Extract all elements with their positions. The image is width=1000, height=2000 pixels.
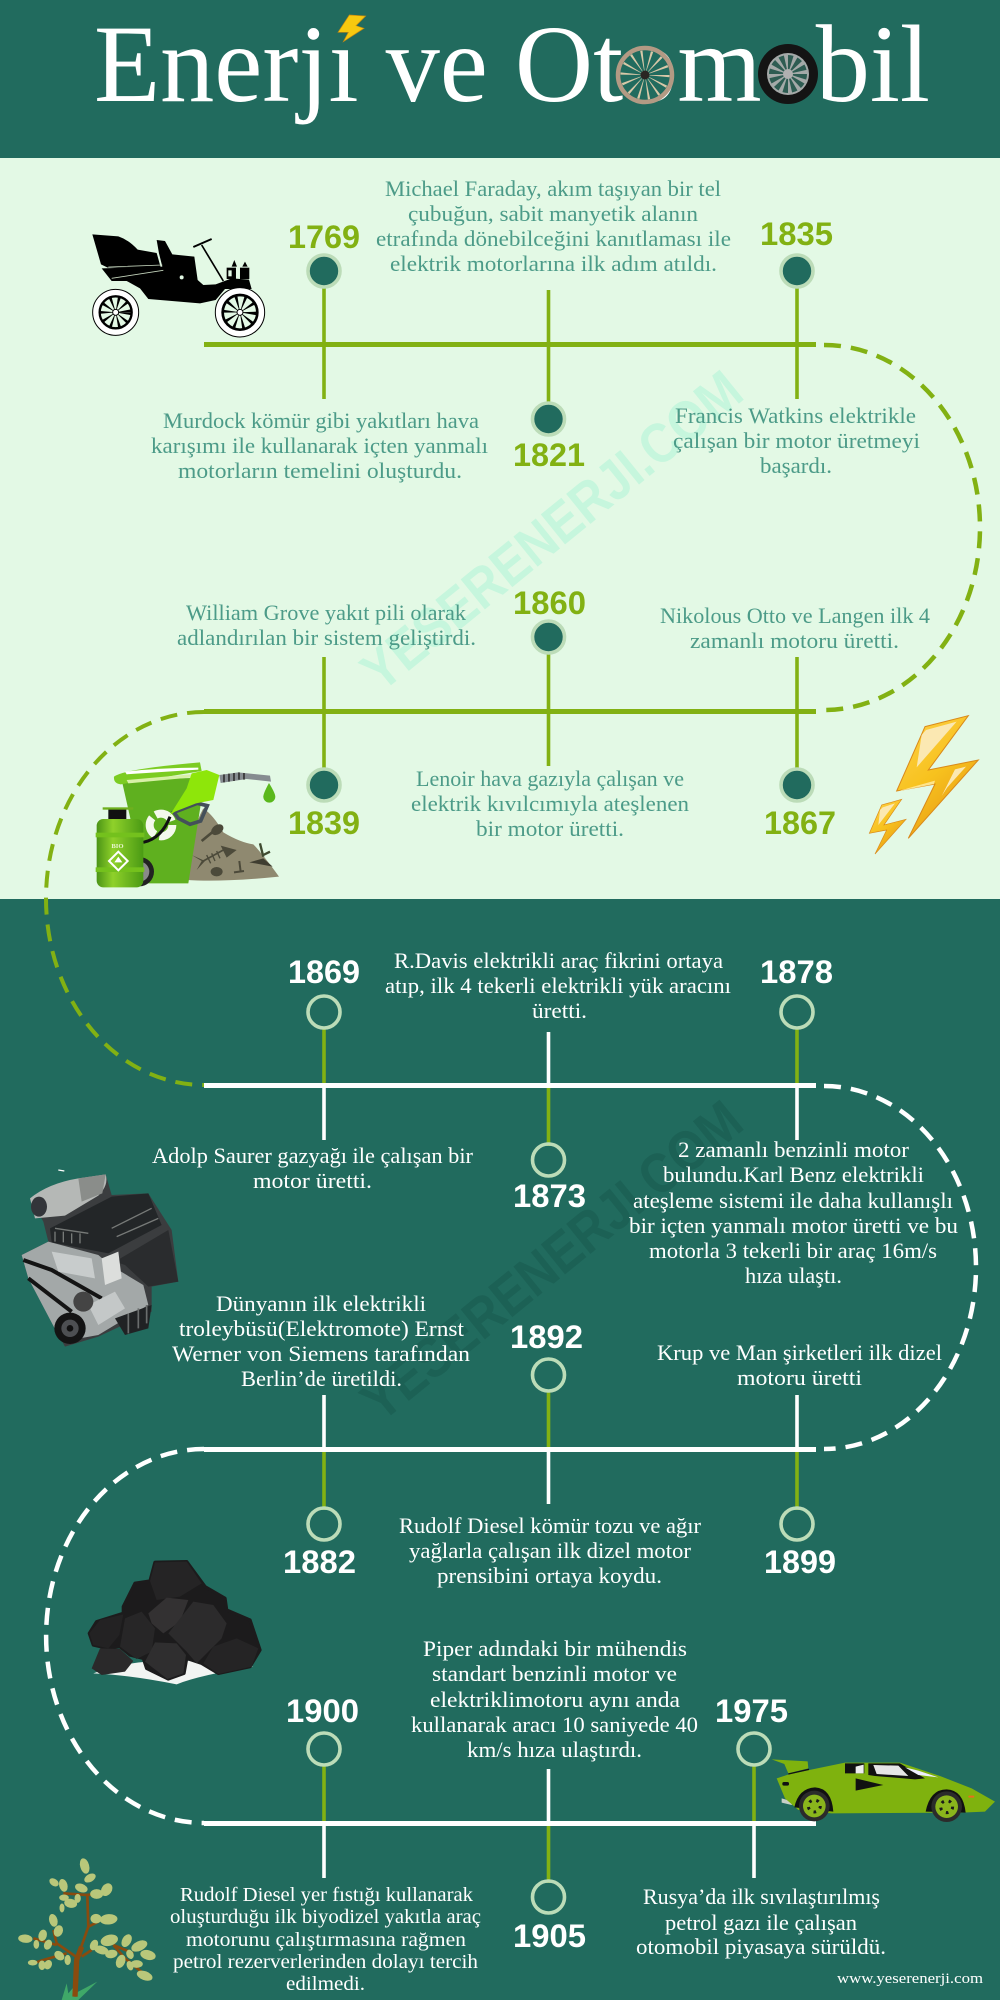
milestone 1839 — [177, 600, 476, 841]
milestone 1873: atıp, ilk 4 tekerli elektrikli yük aracını — [385, 973, 731, 998]
milestone 1892: 1892 — [510, 1319, 583, 1355]
milestone 1869: motor üretti. — [253, 1168, 372, 1193]
milestone 1892: yağlarla çalışan ilk dizel motor — [409, 1538, 692, 1563]
dashed connector: row 2 to row 3 — [46, 712, 204, 1085]
milestone 1769 — [151, 219, 488, 483]
icon: biofuel bin, nozzle and waste pile — [96, 762, 279, 887]
milestone 1882: Berlin’de üretildi. — [241, 1366, 402, 1391]
website credit: www.yeserenerji.com — [837, 1971, 983, 1987]
icon: title lightning bolt — [336, 14, 366, 45]
milestone 1860: Lenoir hava gazıyla çalışan ve — [416, 766, 684, 791]
milestone 1873: R.Davis elektrikli araç fikrini ortaya — [394, 948, 723, 973]
milestone 1821: 1821 — [513, 437, 585, 473]
milestone 1873: 1873 — [513, 1178, 586, 1214]
milestone 1878: hıza ulaştı. — [745, 1263, 842, 1288]
milestone 1905: km/s hıza ulaştırdı. — [467, 1737, 642, 1762]
timeline row 2 — [177, 585, 930, 841]
milestone 1882 — [172, 1291, 470, 1580]
milestone 1900: oluşturduğu ilk biyodizel yakıtla araç — [170, 1906, 481, 1928]
watermark: dark panel: YESERENERJI.COM — [349, 1088, 754, 1433]
icon: young tree — [18, 1858, 156, 2000]
icon: coal pile — [89, 1562, 260, 1684]
milestone 1882: troleybüsü(Elektromote) Ernst — [179, 1316, 464, 1341]
milestone 1892 — [399, 1319, 702, 1588]
milestone 1878: ateşleme sistemi ile daha kullanışlı — [633, 1188, 953, 1213]
icon: biofuel bin, nozzle and waste pile: BIO — [111, 843, 124, 850]
milestone 1860: elektrik kıvılcımıyla ateşlenen — [411, 791, 689, 816]
milestone 1860 — [411, 585, 689, 841]
milestone 1905: 1905 — [513, 1918, 586, 1954]
milestone 1839: 1839 — [288, 805, 360, 841]
milestone 1878 — [629, 954, 958, 1288]
milestone 1899: motoru üretti — [737, 1365, 862, 1390]
milestone 1905: standart benzinli motor ve — [432, 1661, 677, 1686]
icon: engine — [22, 1170, 178, 1347]
milestone 1873: üretti. — [532, 998, 587, 1023]
milestone 1878: 1878 — [760, 954, 833, 990]
milestone 1900: edilmedi. — [286, 1973, 365, 1995]
milestone 1873 — [385, 948, 731, 1214]
milestone 1900: 1900 — [286, 1693, 359, 1729]
milestone 1975: Rusya’da ilk sıvılaştırılmış — [643, 1884, 880, 1909]
icon: modern tire — [758, 44, 818, 104]
milestone 1867 — [660, 603, 930, 841]
milestone 1900: petrol rezerverlerinden dolayı tercih — [173, 1951, 478, 1973]
milestone 1835: başardı. — [760, 453, 832, 478]
milestone 1839: William Grove yakıt pili olarak — [186, 600, 466, 625]
timeline row 4 — [172, 1291, 942, 1588]
milestone 1878: motorla 3 tekerli bir araç 16m/s — [649, 1238, 937, 1263]
milestone 1975 — [636, 1693, 886, 1959]
milestone 1878: bulundu.Karl Benz elektrikli — [663, 1162, 924, 1187]
dashed connector: row 3 to row 4 — [824, 1086, 976, 1449]
milestone 1882: 1882 — [283, 1544, 356, 1580]
milestone 1975: otomobil piyasaya sürüldü. — [636, 1934, 886, 1959]
milestone 1899: Krup ve Man şirketleri ilk dizel — [657, 1340, 942, 1365]
milestone 1835: çalışan bir motor üretmeyi — [673, 428, 920, 453]
milestone 1869: Adolp Saurer gazyağı ile çalışan bir — [152, 1143, 474, 1168]
dashed connector: row 1 to row 2 — [824, 345, 980, 710]
dashed connector: row 4 to row 5 — [46, 1449, 204, 1823]
panel: dark timeline background — [0, 899, 1000, 2000]
milestone 1892: Rudolf Diesel kömür tozu ve ağır — [399, 1513, 702, 1538]
watermark: light panel: YESERENERJI.COM — [349, 358, 754, 703]
milestone 1900: Rudolf Diesel yer fıstığı kullanarak — [180, 1884, 474, 1906]
milestone 1821: Michael Faraday, akım taşıyan bir tel — [385, 176, 721, 201]
milestone 1882: Werner von Siemens tarafından — [172, 1341, 470, 1366]
milestone 1975: petrol gazı ile çalışan — [665, 1910, 857, 1935]
milestone 1821: çubuğun, sabit manyetik alanın — [408, 201, 698, 226]
milestone 1869 — [152, 954, 474, 1193]
icon: lightning bolts — [869, 716, 978, 854]
icon: antique car — [92, 234, 265, 337]
milestone 1905: Piper adındaki bir mühendis — [423, 1636, 687, 1661]
timeline row 5 — [170, 1636, 886, 1995]
timeline row 1 — [151, 176, 920, 483]
milestone 1867: zamanlı motoru üretti. — [690, 628, 899, 653]
milestone 1769: karışımı ile kullanarak içten yanmalı — [151, 433, 488, 458]
milestone 1975: 1975 — [715, 1693, 788, 1729]
milestone 1878: bir içten yanmalı motor üretti ve bu — [629, 1213, 958, 1238]
milestone 1878: 2 zamanlı benzinli motor — [678, 1137, 910, 1162]
milestone 1905 — [411, 1636, 698, 1954]
timeline row 3 — [152, 948, 958, 1288]
icon: green sports car — [772, 1759, 995, 1822]
milestone 1821: etrafında dönebilceğini kanıtlaması ile — [376, 226, 731, 251]
milestone 1899 — [657, 1340, 942, 1580]
milestone 1905: elektriklimotoru aynı anda — [430, 1687, 680, 1712]
milestone 1835: Francis Watkins elektrikle — [675, 403, 916, 428]
milestone 1860: bir motor üretti. — [476, 816, 624, 841]
milestone 1899: 1899 — [764, 1544, 836, 1580]
milestone 1905: kullanarak aracı 10 saniyede 40 — [411, 1712, 698, 1737]
title: Enerji ve Otomobil — [94, 3, 930, 125]
milestone 1867: Nikolous Otto ve Langen ilk 4 — [660, 603, 930, 628]
milestone 1900: motorunu çalıştırmasına rağmen — [186, 1929, 466, 1951]
milestone 1882: Dünyanın ilk elektrikli — [216, 1291, 426, 1316]
milestone 1821: elektrik motorlarına ilk adım atıldı. — [390, 251, 717, 276]
milestone 1769: 1769 — [288, 219, 360, 255]
milestone 1869: 1869 — [288, 954, 360, 990]
milestone 1835: 1835 — [760, 216, 833, 252]
milestone 1860: 1860 — [513, 585, 586, 621]
milestone 1867: 1867 — [764, 805, 836, 841]
panel: header background — [0, 0, 1000, 158]
milestone 1900 — [170, 1693, 481, 1995]
milestone 1892: prensibini ortaya koydu. — [437, 1563, 662, 1588]
milestone 1839: adlandırılan bir sistem geliştirdi. — [177, 625, 476, 650]
milestone 1821 — [376, 176, 731, 473]
milestone 1769: Murdock kömür gibi yakıtları hava — [163, 408, 479, 433]
milestone 1769: motorların temelini oluşturdu. — [178, 458, 462, 483]
icon: wooden wheel — [618, 48, 672, 102]
panel: light timeline background — [0, 158, 1000, 899]
milestone 1835 — [673, 216, 920, 478]
